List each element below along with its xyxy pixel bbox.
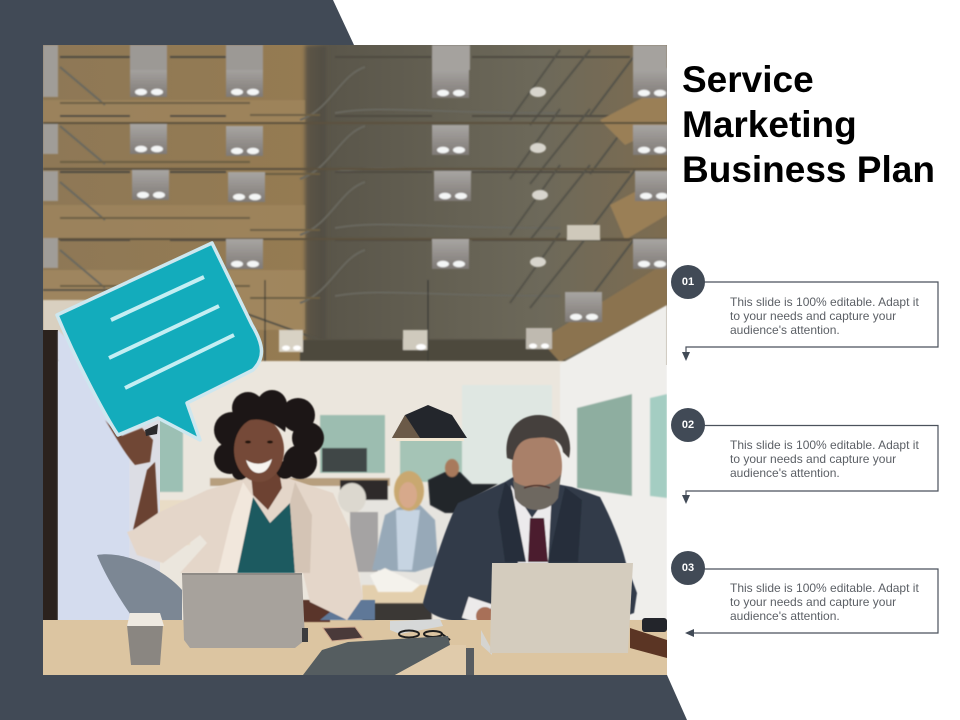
step 01 text: to your needs and capture your — [730, 309, 896, 323]
step 02 text: This slide is 100% editable. Adapt it — [730, 438, 919, 452]
step 01 number: 01 — [682, 276, 694, 288]
phone — [323, 627, 363, 641]
step 02 text — [730, 438, 919, 480]
title: Service — [682, 59, 814, 100]
table — [43, 620, 667, 675]
step 01 text: This slide is 100% editable. Adapt it — [730, 295, 919, 309]
keyboard — [390, 619, 443, 634]
step 03 text: to your needs and capture your — [730, 595, 896, 609]
laptop: man — [481, 563, 633, 655]
title: Marketing — [682, 104, 857, 145]
tablet folder — [303, 636, 474, 675]
step 02 number: 02 — [682, 419, 694, 431]
step 03 text — [730, 581, 919, 623]
step 03 text: This slide is 100% editable. Adapt it — [730, 581, 919, 595]
step 03 number: 03 — [682, 562, 694, 574]
coffee cup — [127, 613, 164, 665]
step 02 text: to your needs and capture your — [730, 452, 896, 466]
background man — [428, 459, 498, 513]
step 01 text — [730, 295, 919, 337]
step 01 text: audience's attention. — [730, 323, 840, 337]
man in suit — [423, 415, 637, 625]
pendant lamp — [392, 405, 467, 441]
laptop: woman — [182, 573, 308, 648]
background woman — [370, 471, 438, 592]
back wall — [43, 300, 667, 623]
woman — [105, 390, 375, 622]
ceiling — [43, 45, 667, 365]
side panel and column — [43, 330, 160, 622]
chair — [97, 554, 182, 621]
title: Business Plan — [682, 149, 935, 190]
step 02 text: audience's attention. — [730, 466, 840, 480]
office photo illustration — [43, 45, 667, 675]
step 03 text: audience's attention. — [730, 609, 840, 623]
speech bubble prop — [57, 243, 262, 440]
desk items — [630, 618, 667, 658]
title — [682, 59, 935, 190]
glasses — [399, 630, 450, 640]
